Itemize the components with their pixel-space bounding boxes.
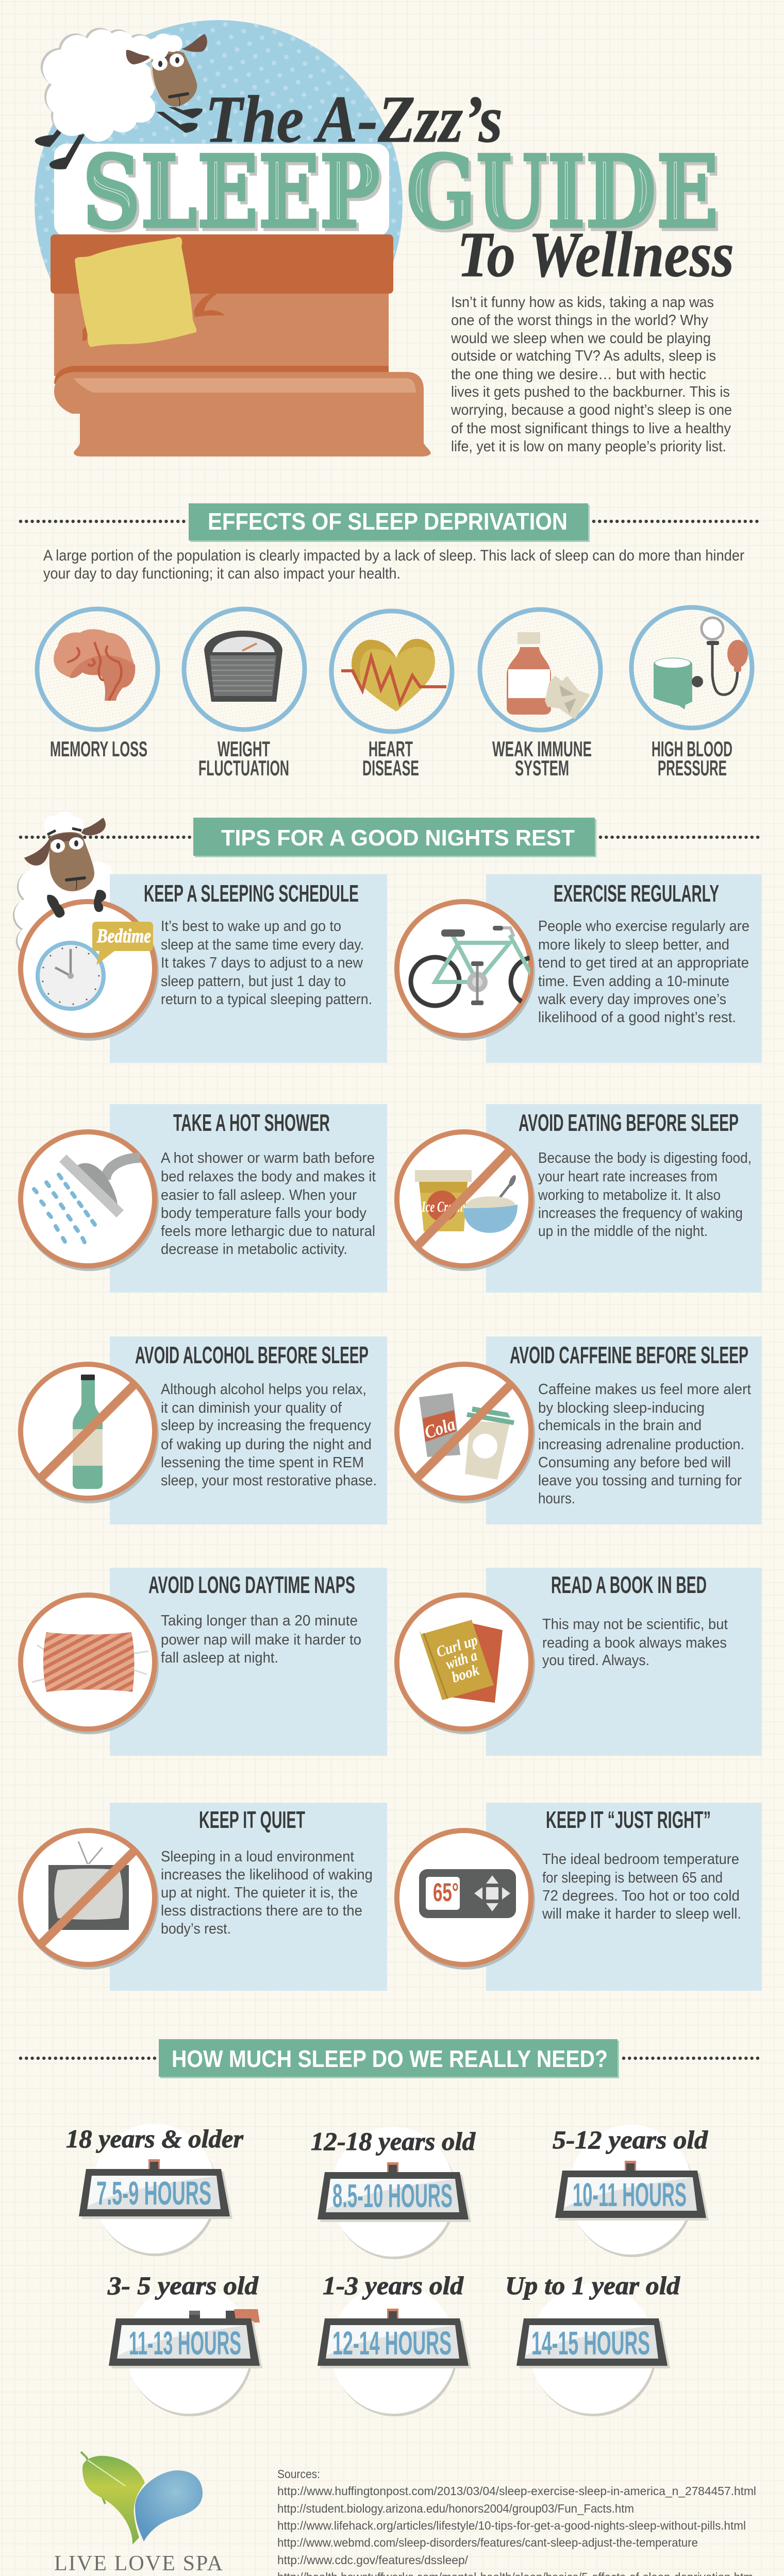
body text [538, 1381, 751, 1507]
body text: People who exercise regularly are [538, 918, 749, 935]
device: hours display [109, 2309, 262, 2368]
body text: body’s rest. [161, 1921, 231, 1937]
body text [161, 1150, 376, 1258]
icon: thermostat: 65° [433, 1878, 459, 1907]
title: Sleep Guide [87, 151, 718, 233]
icon: ice cream and bowl [415, 1170, 518, 1233]
heading: AVOID ALCOHOL BEFORE SLEEP [135, 1342, 369, 1368]
callout: bedtime bubble: Bedtime [96, 925, 151, 947]
body text: It’s best to wake up and go to [161, 918, 341, 935]
section banner: tips for a good nights rest: TIPS FOR A GOOD NIGHTS REST [221, 825, 575, 851]
white mattress panel behind headline [54, 144, 389, 236]
body text: Sleeping in a loud environment [161, 1849, 354, 1865]
title: The A-Zzz's: The A-Zzz’s [205, 82, 503, 157]
panel: avoid caffeine before sleep [396, 1336, 762, 1524]
icon: brain [54, 629, 135, 701]
body text: decrease in metabolic activity. [161, 1241, 347, 1258]
label: SYSTEM [515, 756, 569, 780]
label: DISEASE [362, 756, 419, 780]
body text: walk every day improves one’s [538, 991, 726, 1008]
icon: cola can and coffee cup: Cola [422, 1414, 458, 1443]
body text: sleep by increasing the frequency [161, 1417, 371, 1434]
title: Sleep Guide: SLEEP [82, 133, 380, 250]
no symbol [416, 1151, 509, 1247]
sources list: http://www.cdc.gov/features/dssleep/ [277, 2553, 469, 2567]
blue dotted moon behind header [35, 20, 403, 388]
logo: Live Love Spa [53, 2452, 225, 2576]
body text: return to a typical sleeping pattern. [161, 991, 372, 1008]
body text: Taking longer than a 20 minute [161, 1613, 358, 1629]
heading: KEEP A SLEEPING SCHEDULE [144, 880, 359, 907]
sources list [277, 2467, 756, 2576]
device: hours display: 7.5-9 HOURS [96, 2175, 211, 2212]
book cover text: Curl up [434, 1632, 480, 1660]
icon: clock [38, 942, 106, 1010]
panel: take a hot shower [20, 1104, 387, 1293]
body text: It takes 7 days to adjust to a new [161, 955, 363, 971]
body text: Consuming any before bed will [538, 1454, 731, 1471]
label: WEAK IMMUNE [492, 737, 592, 761]
no symbol [41, 1851, 134, 1944]
device: hours display: 11-13 HOURS [129, 2325, 241, 2362]
body text [161, 918, 372, 1008]
panel: avoid alcohol before sleep [20, 1336, 387, 1524]
label: MEMORY LOSS [50, 737, 147, 761]
icon: heart with pulse [341, 639, 446, 711]
effect: heart disease [331, 611, 452, 780]
effects intro text: your day to day functioning; it can also impact your health. [43, 565, 401, 582]
icon: ice cream and bowl: Ice Cream [421, 1198, 465, 1215]
body text: hours. [538, 1490, 575, 1507]
logo: Live Love Spa: LIVE LOVE SPA [54, 2552, 223, 2575]
body text: The ideal bedroom temperature [542, 1851, 739, 1868]
body text [161, 1849, 373, 1937]
effect: weak immune system [480, 609, 600, 780]
body text: less distractions there are to the [161, 1903, 362, 1919]
device: hours display [516, 2318, 670, 2368]
age group: 12-18 years old [311, 2127, 476, 2259]
title: Sleep Guide: GUIDE [406, 133, 719, 250]
sources list: http://student.biology.arizona.edu/honors2004/group03/Fun_Facts.htm [277, 2502, 634, 2515]
section banner: how much sleep do we really need [21, 2039, 761, 2078]
device: hours display: 8.5-10 HOURS [332, 2177, 453, 2214]
panel: keep it quiet [20, 1803, 387, 1991]
intro paragraph: of the most significant things to live a healthy [451, 420, 731, 437]
icon: striped pillow [32, 1632, 148, 1692]
body text: leave you tossing and turning for [538, 1472, 742, 1489]
body text: power nap will make it harder to [161, 1632, 361, 1648]
body text: for sleeping is between 65 and [542, 1870, 723, 1886]
effects intro text [43, 547, 744, 582]
label [492, 737, 592, 780]
illustration: sofa bed [51, 234, 431, 456]
intro paragraph: outside or watching TV? As adults, sleep is [451, 348, 716, 364]
no symbol [418, 1385, 510, 1478]
heading: KEEP IT QUIET [199, 1806, 305, 1833]
intro paragraph: one of the worst things in the world? Why [451, 312, 708, 329]
body text [538, 918, 749, 1026]
label [198, 737, 289, 780]
icon: wine bottle [73, 1375, 103, 1489]
book cover text: book [449, 1662, 481, 1686]
label: HEART [369, 737, 413, 761]
body text: A hot shower or warm bath before [161, 1150, 375, 1166]
age group: 1-3 years old [318, 2271, 471, 2416]
device: hours display [555, 2161, 709, 2221]
body text: up at night. The quieter it is, the [161, 1885, 358, 1901]
body text: feels more lethargic due to natural [161, 1223, 375, 1240]
body text: more likely to sleep better, and [538, 937, 729, 953]
icon: television [48, 1841, 129, 1930]
body text: up in the middle of the night. [538, 1223, 708, 1240]
intro paragraph: the one thing we desire… but with hectic [451, 366, 706, 383]
effect: memory loss [37, 609, 158, 761]
body text: your heart rate increases from [538, 1168, 718, 1185]
section banner: how much sleep do we really need: HOW MUCH SLEEP DO WE REALLY NEED? [172, 2045, 608, 2072]
body text: 72 degrees. Too hot or too cold [542, 1888, 740, 1904]
icon: yellow pillow [75, 237, 196, 347]
body text: increases the likelihood of waking [161, 1867, 373, 1883]
device: hours display: 12-14 HOURS [332, 2325, 452, 2362]
body text: by blocking sleep-inducing [538, 1400, 705, 1416]
body text [542, 1616, 728, 1669]
body text: chemicals in the brain and [538, 1417, 702, 1434]
device: hours display [79, 2159, 232, 2219]
icon: medicine bottle and tissue [507, 632, 590, 719]
body text: working to metabolize it. It also [538, 1187, 721, 1204]
intro paragraph: Isn’t it funny how as kids, taking a nap was [451, 294, 714, 311]
icon: shower head [34, 1158, 140, 1242]
label: PRESSURE [658, 756, 727, 780]
book cover text [434, 1632, 489, 1688]
body text: sleep at the same time every day. [161, 937, 364, 953]
effect: weight fluctuation [184, 609, 305, 780]
icon: sheep hooves [47, 890, 106, 918]
device: hours display [318, 2162, 471, 2222]
body text: fall asleep at night. [161, 1650, 278, 1666]
age group: 3-5 years old [107, 2271, 262, 2416]
intro paragraph [451, 294, 732, 455]
sources list: Sources: [277, 2467, 320, 2481]
age group: up to 1 year old [505, 2271, 680, 2416]
body text [161, 1613, 361, 1666]
body text: Although alcohol helps you relax, [161, 1381, 366, 1398]
heading: TAKE A HOT SHOWER [173, 1109, 330, 1136]
body text: sleep pattern, but just 1 day to [161, 973, 346, 990]
callout: bedtime bubble [92, 922, 153, 965]
panel: avoid eating before sleep [396, 1104, 762, 1293]
book cover text: with a [444, 1647, 479, 1673]
body text: tend to get tired at an appropriate [538, 955, 749, 971]
intro paragraph: life, yet it is low on many people’s priority list. [451, 438, 726, 455]
section banner: tips for a good nights rest [21, 818, 761, 857]
age label: 3- 5 years old [107, 2271, 259, 2300]
device: hours display: 10-11 HOURS [573, 2176, 687, 2213]
intro paragraph: lives it gets pushed to the backburner. This is [451, 384, 730, 400]
label: FLUCTUATION [198, 756, 289, 780]
body text: sleep, your most restorative phase. [161, 1472, 377, 1489]
sources list: http://www.webmd.com/sleep-disorders/features/cant-sleep-adjust-the-temperature [277, 2536, 698, 2549]
body text: of waking up during the night and [161, 1436, 372, 1453]
effect: high blood pressure [631, 607, 752, 780]
body text: reading a book always makes [542, 1635, 727, 1651]
body text: body temperature falls your body [161, 1205, 366, 1222]
age label: Up to 1 year old [505, 2271, 680, 2300]
intro paragraph: would we sleep when we could be playing [451, 330, 711, 347]
icon: bicycle [408, 926, 530, 1008]
sources list: http://www.lifehack.org/articles/lifestyle/10-tips-for-get-a-good-nights-sleep-without-pills.html [277, 2519, 746, 2532]
icon: bathroom scale [204, 631, 282, 702]
body text [542, 1851, 741, 1922]
body text [538, 1150, 752, 1240]
icon: thermostat [419, 1869, 516, 1918]
title: Sleep Guide: SLEEP [82, 133, 380, 250]
title: Sleep Guide: GUIDE [406, 133, 719, 250]
body text: lessening the time spent in REM [161, 1454, 364, 1471]
icon: books [419, 1615, 503, 1703]
body text: bed relaxes the body and makes it [161, 1168, 376, 1185]
icon: blood pressure cuff [654, 618, 748, 709]
age label: 5-12 years old [553, 2125, 708, 2154]
panel: read a book in bed [396, 1568, 762, 1756]
device: hours display [318, 2309, 471, 2368]
age label: 18 years & older [66, 2124, 244, 2153]
title: To Wellness: To Wellness [457, 219, 734, 291]
label: WEIGHT [218, 737, 270, 761]
body text: easier to fall asleep. When your [161, 1187, 357, 1204]
body text: increases the frequency of waking [538, 1205, 743, 1222]
label [652, 737, 732, 780]
heading: AVOID LONG DAYTIME NAPS [148, 1571, 355, 1598]
icon: jumping sheep [35, 28, 207, 170]
body text: This may not be scientific, but [542, 1616, 728, 1633]
body text: will make it harder to sleep well. [542, 1906, 741, 1922]
body text: time. Even adding a 10-minute [538, 973, 729, 990]
body text: it can diminish your quality of [161, 1400, 342, 1416]
body text: increasing adrenaline production. [538, 1436, 744, 1453]
age label: 1-3 years old [323, 2271, 464, 2300]
panel: keep it just right [396, 1803, 762, 1991]
body text: likelihood of a good night’s rest. [538, 1009, 736, 1026]
device: hours display: 14-15 HOURS [531, 2325, 650, 2362]
section banner: effects of sleep deprivation: EFFECTS OF SLEEP DEPRIVATION [208, 508, 568, 535]
panel: avoid long daytime naps [20, 1568, 387, 1756]
age label: 12-18 years old [311, 2127, 476, 2156]
icon: sheep peeking over clock [13, 811, 112, 963]
label [362, 737, 419, 780]
icon: cola can and coffee cup [419, 1393, 514, 1480]
body text: Caffeine makes us feel more alert [538, 1381, 751, 1398]
body text [161, 1381, 377, 1489]
panel: exercise regularly [396, 874, 762, 1063]
section banner: effects of sleep deprivation [21, 503, 761, 542]
body text: Because the body is digesting food, [538, 1150, 752, 1166]
body text: you tired. Always. [542, 1652, 649, 1669]
age group: 18 years and older [66, 2124, 244, 2256]
sources list: http://www.huffingtonpost.com/2013/03/04/sleep-exercise-sleep-in-america_n_2784457.html [277, 2484, 756, 2498]
age group: 5-12 years old [553, 2125, 709, 2257]
panel: keep a sleeping schedule [20, 874, 387, 1063]
no symbol [41, 1385, 134, 1478]
intro paragraph: worrying, because a good night’s sleep is one [451, 402, 732, 418]
